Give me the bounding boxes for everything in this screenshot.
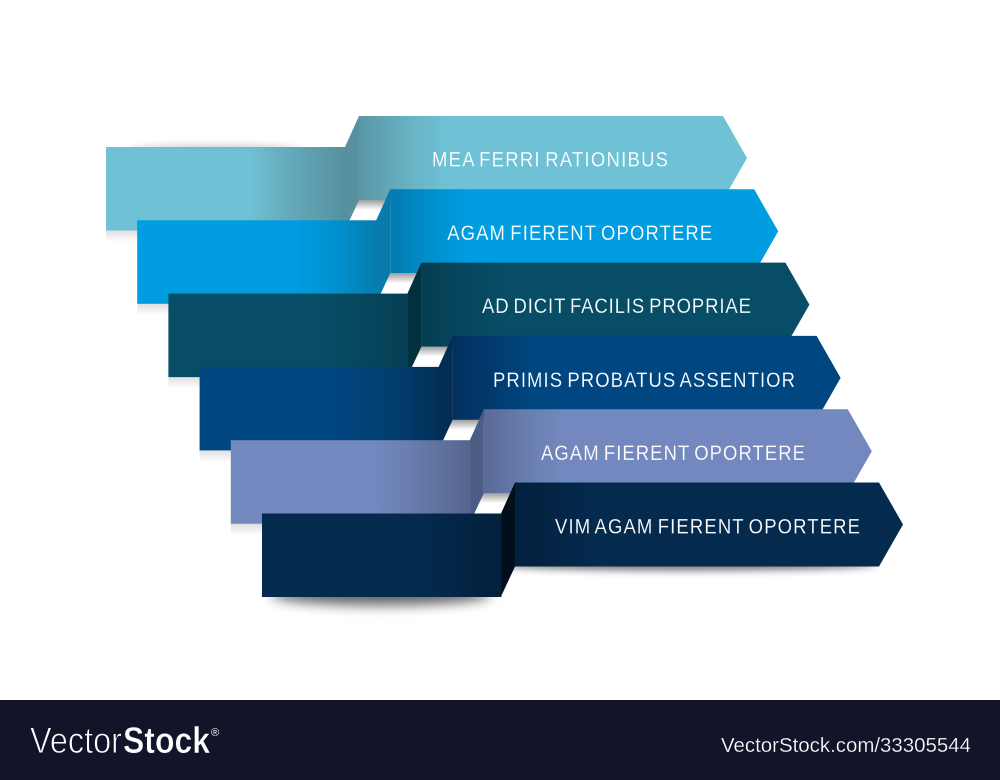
- image id: VectorStock.com/33305544: [721, 734, 971, 757]
- footer bar: [0, 700, 1000, 780]
- ribbon 1: mea ferri rationibus: MEA FERRI RATIONIBUS: [432, 148, 668, 172]
- vectorstock logo: Vector: [30, 720, 122, 761]
- ribbon 4: primis probatus assentior: [200, 336, 841, 462]
- vectorstock logo: Stock: [123, 720, 210, 761]
- vectorstock logo: [30, 720, 219, 761]
- ribbon 2: agam fierent oportere: AGAM FIERENT OPORTERE: [447, 222, 712, 245]
- ribbon 2: agam fierent oportere: [137, 189, 778, 315]
- vectorstock logo: ®: [211, 727, 219, 739]
- ribbon 4: primis probatus assentior: PRIMIS PROBATUS ASSENTIOR: [493, 369, 795, 392]
- ribbon 6: vim agam fierent oportere: VIM AGAM FIERENT OPORTERE: [555, 515, 860, 539]
- ribbon 1: mea ferri rationibus: [106, 116, 747, 242]
- shadow above first ribbon: [130, 145, 300, 155]
- ribbon 3: ad dicit facilis propriae: AD DICIT FACILIS PROPRIAE: [482, 295, 751, 318]
- ribbon 3: ad dicit facilis propriae: [168, 263, 809, 389]
- ribbon 6: vim agam fierent oportere: [262, 482, 903, 606]
- ribbon 5: agam fierent oportere: [231, 409, 872, 535]
- ribbon 5: agam fierent oportere: AGAM FIERENT OPORTERE: [541, 442, 805, 465]
